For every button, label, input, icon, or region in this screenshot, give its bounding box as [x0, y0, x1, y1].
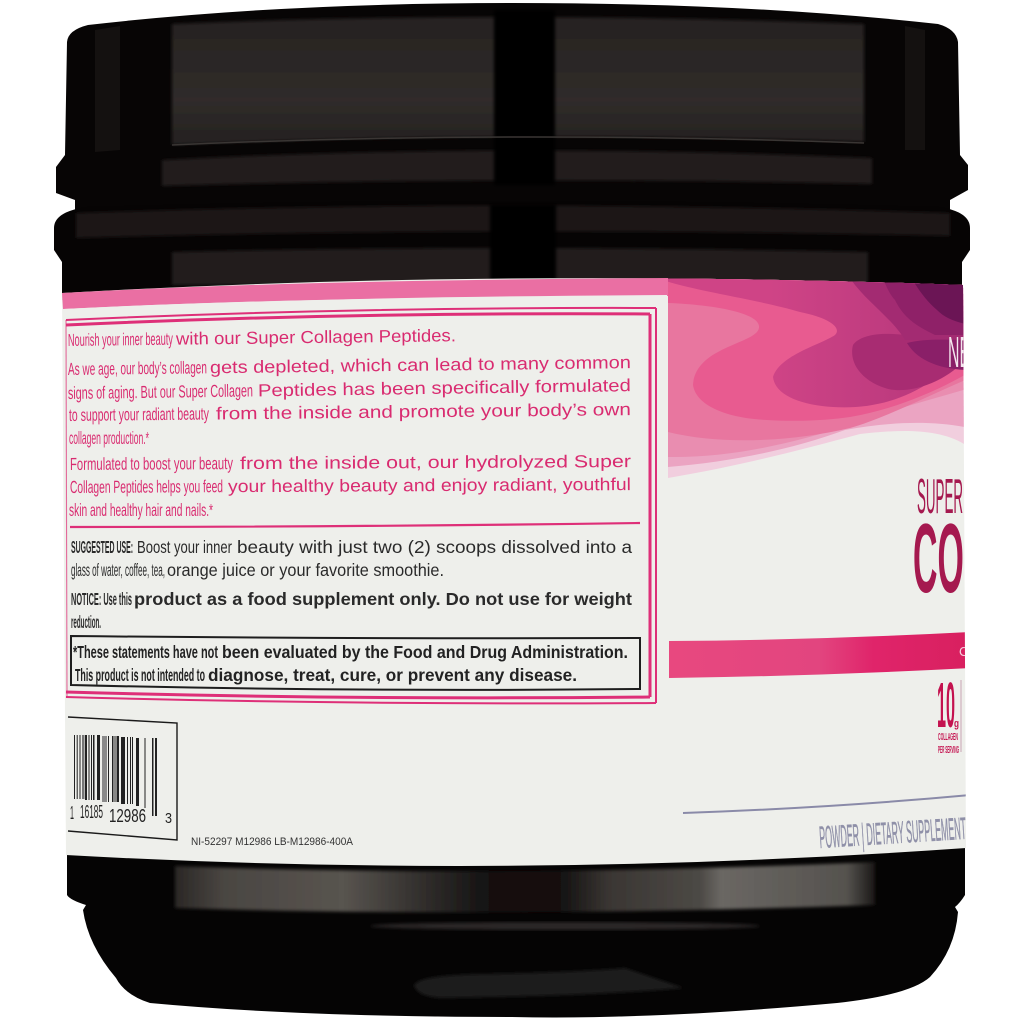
- jar base: [67, 845, 965, 1017]
- lid side glints: [95, 26, 925, 152]
- text block: suggested use: Boost your inner: [137, 537, 232, 557]
- text block: suggested use: [71, 537, 632, 580]
- text block: pink description: signs of aging. But our Super Collagen: [68, 380, 253, 403]
- text block: suggested use: beauty with just two (2) scoops dissolved into a: [237, 537, 632, 557]
- text block: notice: product as a food supplement only. Do not use for weight: [134, 589, 632, 609]
- base lower glint: [414, 968, 684, 998]
- text block: pink description: with our Super Collagen Peptides.: [175, 325, 456, 349]
- panel: description frame: [66, 308, 656, 703]
- jar shoulder: [54, 201, 970, 300]
- base reflective band: [175, 862, 875, 912]
- pink strip: [669, 632, 970, 678]
- callout: 10g collagen per serving: g: [954, 718, 959, 730]
- lid ring panel: [162, 150, 872, 186]
- disclaimer text: *These statements have not: [73, 642, 218, 662]
- callout: 10g collagen per serving: [938, 682, 959, 753]
- label: [62, 270, 1024, 866]
- text block: pink description: As we age, our body’s collagen: [68, 357, 207, 379]
- callout divider: [960, 680, 962, 752]
- label artwork: pink waves: PER SERVING: [938, 745, 959, 756]
- label artwork: pink waves: [668, 278, 966, 852]
- white text panel: [64, 295, 667, 600]
- text block: pink description: skin and healthy hair and nails.*: [69, 500, 213, 520]
- base upper glint: [370, 922, 760, 930]
- grey rule: [683, 795, 970, 813]
- text block: pink description: your healthy beauty and enjoy radiant, youthful: [228, 474, 631, 496]
- shoulder lower panel: [172, 248, 868, 285]
- barcode bars: [74, 735, 157, 816]
- text block: notice: reduction.: [71, 612, 101, 632]
- jar lid: [56, 3, 968, 215]
- text block: pink description: from the inside out, our hydrolyzed Super: [240, 451, 631, 473]
- text block: pink description: gets depleted, which can lead to many common: [210, 352, 631, 377]
- barcode: [68, 717, 177, 840]
- print code: NI-52297 M12986 LB-M12986-400A: [191, 836, 354, 848]
- disclaimer text: diagnose, treat, cure, or prevent any disease.: [208, 665, 577, 685]
- barcode digits: 1: [70, 803, 74, 823]
- barcode digits: 16185: [80, 802, 103, 822]
- label top band left: [62, 278, 668, 309]
- text block: pink description: Formulated to boost your beauty: [70, 453, 233, 474]
- text block: pink description: Nourish your inner beauty: [68, 329, 173, 350]
- text block: pink description: Collagen Peptides helps you feed: [70, 476, 223, 497]
- text block: pink description: Peptides has been specifically formulated: [258, 375, 631, 400]
- disclaimer text: been evaluated by the Food and Drug Administration.: [222, 642, 628, 662]
- text block: suggested use: orange juice or your favorite smoothie.: [167, 560, 444, 580]
- text block: suggested use: glass of water, coffee, tea,: [71, 560, 165, 580]
- barcode digits: [70, 802, 172, 827]
- disclaimer box: [71, 636, 640, 690]
- text block: suggested use: SUGGESTED USE:: [71, 537, 133, 557]
- label artwork: pink waves: 10: [937, 669, 955, 741]
- text block: notice: NOTICE: Use this: [71, 589, 132, 609]
- lid reflection centre: [494, 10, 555, 185]
- barcode digits: 3: [165, 810, 172, 827]
- text block: pink description: [68, 325, 631, 520]
- lid seam glint: [172, 137, 864, 145]
- shoulder lip highlight: [76, 206, 950, 238]
- text block: pink description: collagen production.*: [69, 428, 149, 448]
- text block: pink description: from the inside and promote your body’s own: [216, 399, 631, 423]
- label artwork: pink waves: COLLAGEN: [938, 732, 958, 743]
- text block: notice: [71, 589, 632, 632]
- disclaimer text: This product is not intended to: [75, 665, 205, 685]
- lid highlight panel: [172, 17, 864, 145]
- shoulder reflection: [490, 204, 556, 286]
- barcode digits: 12986: [109, 806, 146, 826]
- disclaimer text: [73, 642, 628, 685]
- text block: pink description: to support your radiant beauty: [69, 404, 209, 425]
